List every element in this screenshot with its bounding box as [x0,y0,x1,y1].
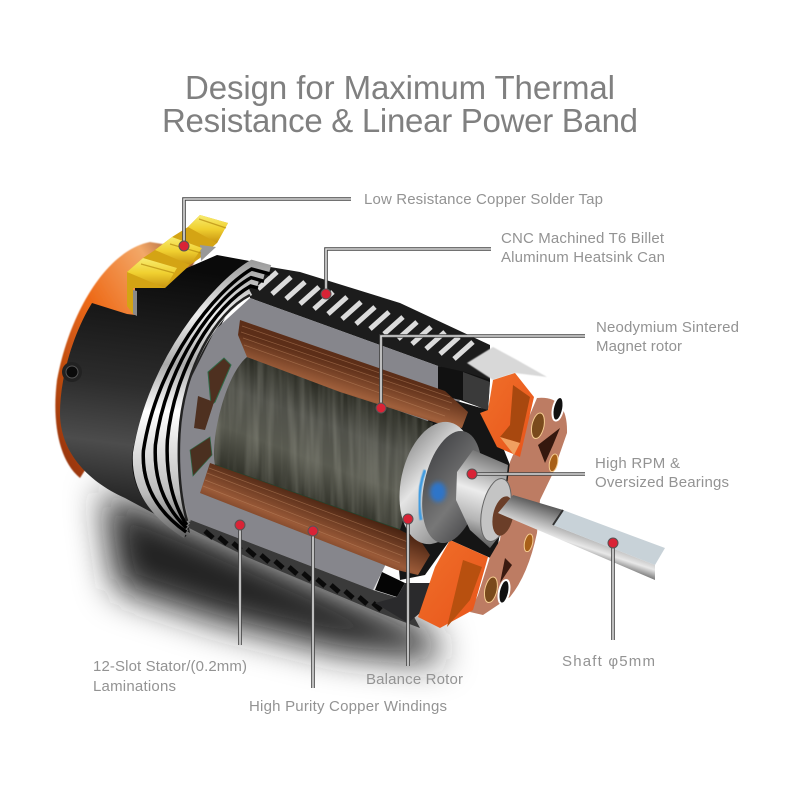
label: stator [93,658,247,695]
leader: bearings [467,469,585,479]
leader: copper windings [308,526,318,688]
black motor end section [60,255,255,533]
motor shadow [102,490,442,662]
label: solder tap: Low Resistance Copper Solder Tap [364,191,603,208]
label: magnet rotor [596,319,739,355]
bottom orange end piece [418,540,488,628]
leader: heatsink can [321,249,491,299]
bearing [456,450,517,548]
bottom heatsink fins [183,517,420,628]
leader: stator [235,520,245,645]
rotor cylinder [214,357,433,530]
label: magnet rotor: Neodymium Sintered [596,319,739,336]
top heatsink fins [247,263,547,382]
screw [62,362,82,382]
top orange end piece [480,373,534,457]
motor illustration [55,215,665,628]
rings of the can [133,262,270,536]
shaft [498,495,665,580]
dark cavity behind rotor [395,395,512,580]
back orange cap [55,242,200,478]
label: magnet rotor: Magnet rotor [596,338,682,355]
leader: balance rotor [403,514,413,666]
gold solder tabs [127,215,228,316]
leader: shaft [608,538,618,640]
bottom black end [375,572,433,623]
label: balance rotor: Balance Rotor [366,671,463,688]
top copper windings [238,320,468,428]
leader: copper solder tap [179,199,351,251]
bottom copper windings [200,463,430,575]
label: shaft: Shaft φ5mm [562,653,655,670]
copper plate [470,397,567,615]
title [162,69,638,139]
label: heatsink can [501,230,665,266]
label: bearings: High RPM & [595,455,680,472]
copper slots [190,358,231,476]
label: bearings [595,455,729,491]
leader: magnet rotor [376,336,585,413]
label: heatsink can: CNC Machined T6 Billet [501,230,665,247]
label: bearings: Oversized Bearings [595,474,729,491]
label: copper windings: High Purity Copper Windings [249,698,447,715]
balance rotor [389,415,491,551]
label: heatsink can: Aluminum Heatsink Can [501,249,665,266]
label: stator: Laminations [93,678,176,695]
black notch and end of can [438,366,490,410]
label: stator: 12-Slot Stator/(0.2mm) [93,658,247,675]
grey stator cutaway [172,298,460,590]
title: Resistance & Linear Power Band [162,102,638,139]
title: Design for Maximum Thermal [185,69,615,106]
